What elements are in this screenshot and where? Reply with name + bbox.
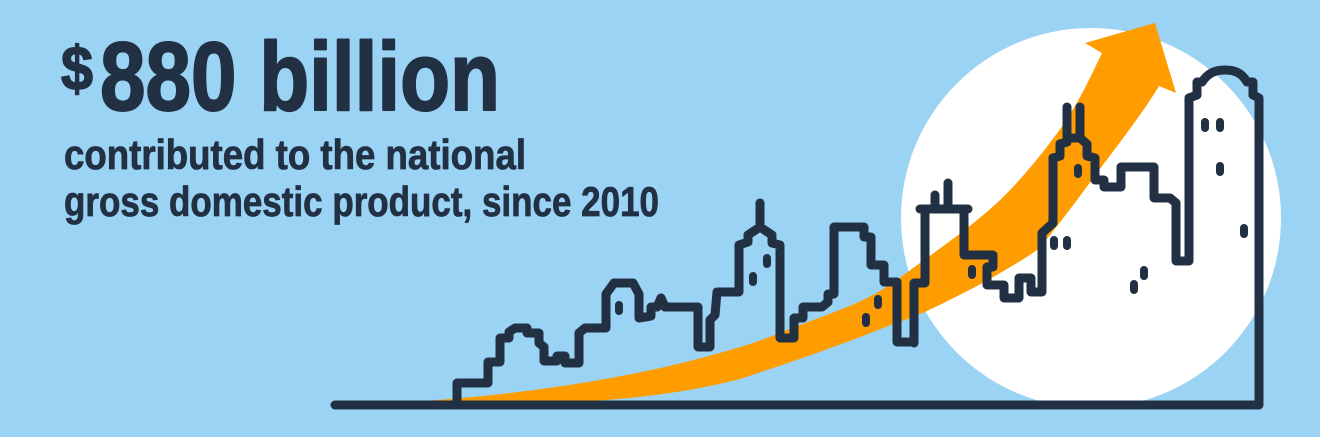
headline: $880 billion: $ (61, 35, 93, 104)
subheading text (64, 131, 659, 225)
building windows (619, 122, 1244, 323)
subheading text: contributed to the national (64, 131, 526, 178)
subheading text: gross domestic product, since 2010 (64, 178, 659, 225)
city skyline outline and ground line (335, 70, 1259, 405)
icon: rising orange arrow (410, 23, 1176, 404)
headline: $880 billion: 880 billion (100, 22, 500, 131)
white circle backdrop (901, 28, 1281, 408)
